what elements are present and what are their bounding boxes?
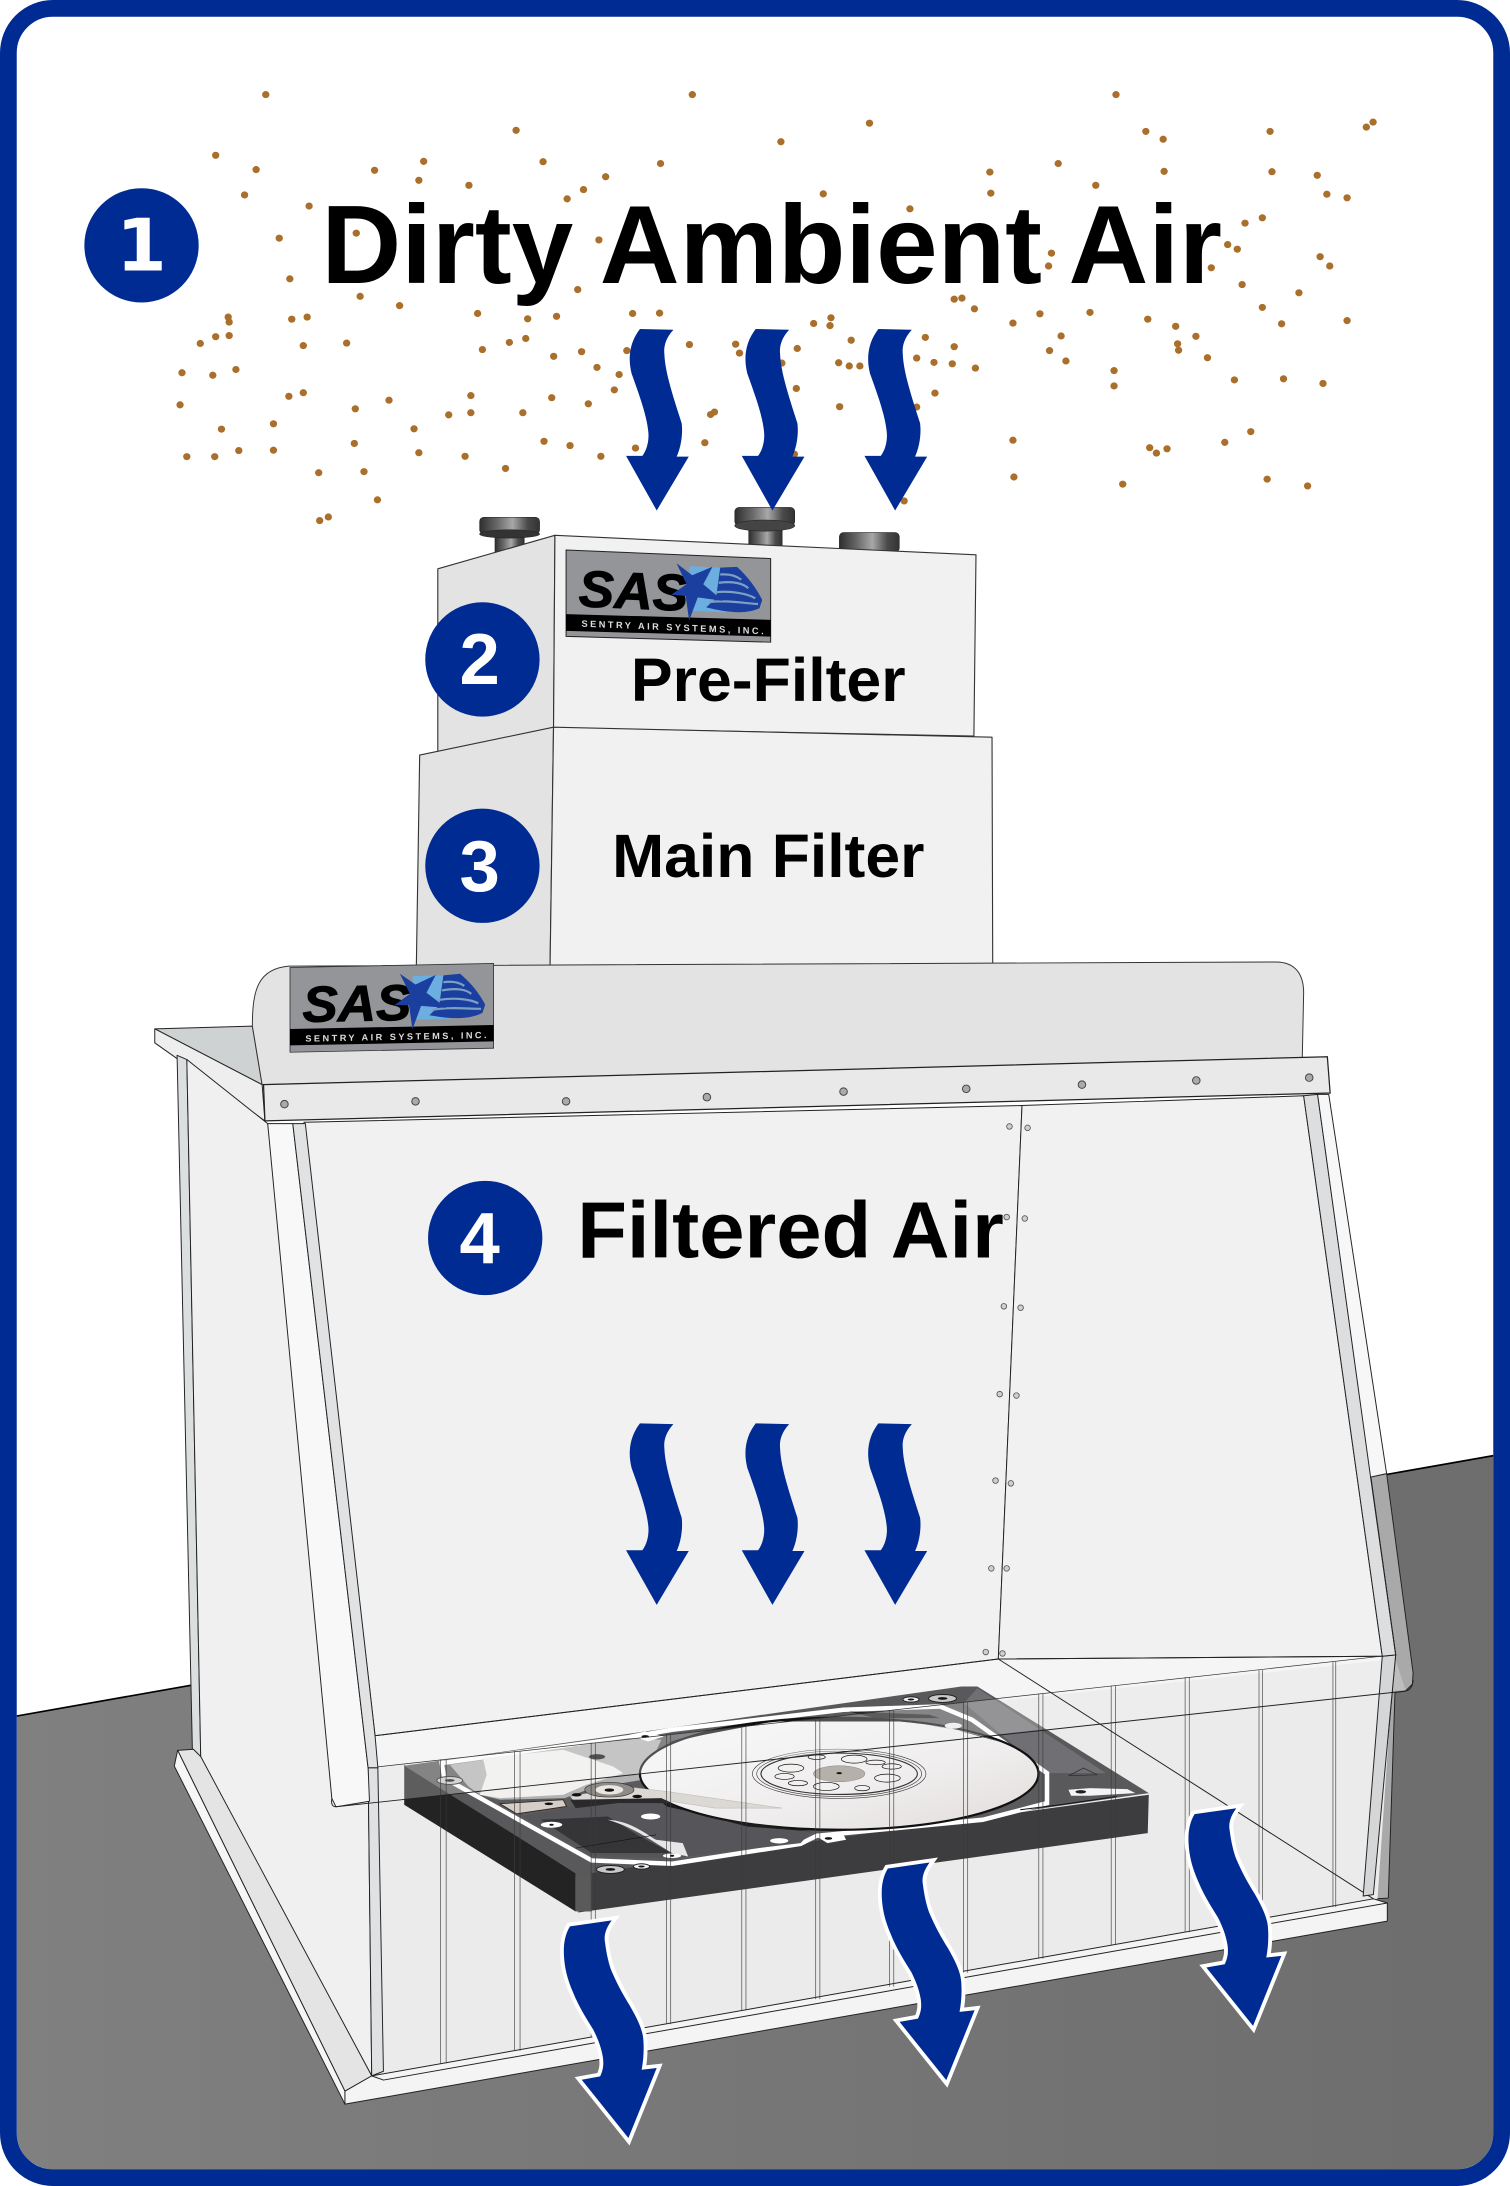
panel: hood side posts [268, 1094, 1413, 1807]
arrow: filtered air 1 [626, 1423, 689, 1605]
arrow: dirty air 1 [626, 329, 689, 511]
arrow: exhaust 1 [564, 1920, 657, 2138]
badge: step 3 [425, 809, 540, 923]
panel: hard disk drive [404, 1686, 1149, 1912]
logo: SAS on pre-filter: SENTRY AIR SYSTEMS, INC. [581, 619, 764, 636]
arrow: dirty air 3 [864, 329, 927, 511]
panel: main filter housing [416, 727, 993, 968]
badge: step 4 [428, 1181, 542, 1295]
panel: translucent hood front glass [336, 1655, 1405, 2076]
badge: step 4: 4 [459, 1198, 500, 1279]
arrow: exhaust 3 [1188, 1808, 1281, 2026]
label: pre-filter: Pre-Filter [631, 645, 906, 714]
arrow: filtered air 3 [864, 1423, 927, 1605]
panel: right side strips [1371, 1474, 1413, 1899]
badge: step 1: 1 [116, 204, 167, 288]
icons: band screws [281, 1074, 1313, 1108]
label: main filter: Main Filter [612, 821, 924, 890]
badge: step 2: 2 [459, 619, 500, 700]
panel: top back panel [252, 962, 1304, 1085]
panel: pre-filter knobs [480, 507, 899, 555]
logo: SAS on hood [290, 963, 494, 1052]
badge: step 1 [84, 188, 199, 303]
title: Dirty Ambient Air [321, 182, 1222, 307]
badge: step 3: 3 [459, 826, 500, 907]
arrow: filtered air 2 [742, 1423, 804, 1605]
logo: SAS on pre-filter [566, 550, 771, 645]
panel: slotted plenum opening [369, 1655, 1394, 2080]
panel: pre-filter housing [438, 535, 976, 754]
floor [0, 1453, 1510, 2186]
panel: hood mounting band [264, 1057, 1330, 1121]
panel: hood back wall [304, 1096, 1396, 1768]
label: filtered air: Filtered Air [577, 1186, 1004, 1275]
logo: SAS on hood: SAS [303, 974, 411, 1033]
dust particles [176, 91, 1377, 524]
arrow: exhaust 2 [882, 1863, 975, 2080]
arrow: dirty air 2 [742, 329, 804, 511]
icons: seam screws [983, 1124, 1030, 1656]
logo: SAS on pre-filter: SAS [579, 559, 688, 622]
panel: fume hood side and shelf [155, 1026, 1387, 2104]
badge: step 2 [425, 602, 540, 717]
logo: SAS on hood: SENTRY AIR SYSTEMS, INC. [305, 1030, 487, 1044]
